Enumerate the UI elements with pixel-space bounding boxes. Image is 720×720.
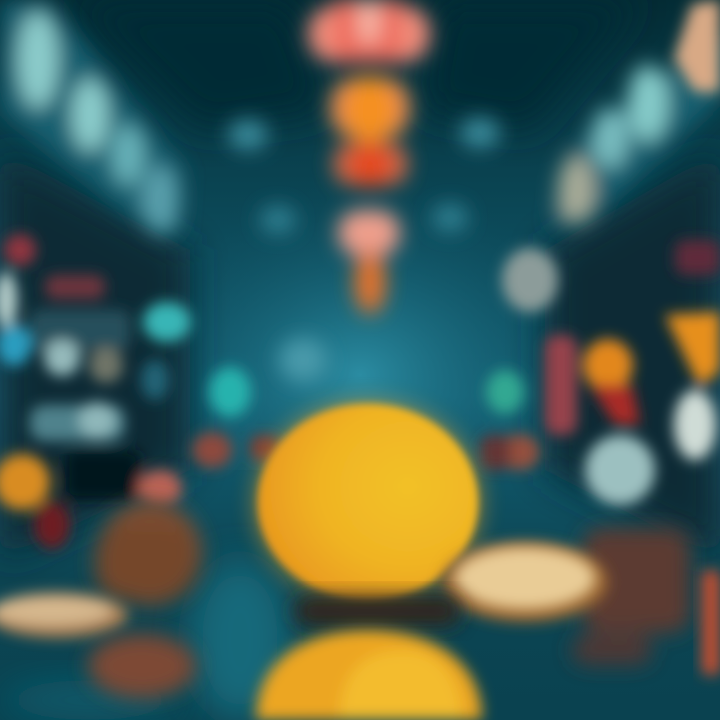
right stall lights — [480, 240, 720, 505]
right edge red reflection — [702, 570, 720, 675]
left floor reflection — [88, 634, 196, 698]
right ceiling light strip — [550, 30, 720, 225]
main gold coin — [252, 399, 484, 607]
dark pedestal under coin — [295, 596, 460, 626]
central hanging lanterns — [308, 0, 430, 314]
left brown coin stack — [95, 501, 202, 605]
top right hanging pennant — [674, 0, 720, 92]
distant ceiling lights — [228, 118, 500, 382]
right brown coin stack — [572, 528, 690, 665]
right cream plate — [442, 542, 608, 622]
left cream plate — [0, 592, 128, 638]
left stall lights — [0, 234, 280, 549]
reflected coin — [256, 630, 482, 720]
left ceiling light strip — [0, 0, 185, 235]
